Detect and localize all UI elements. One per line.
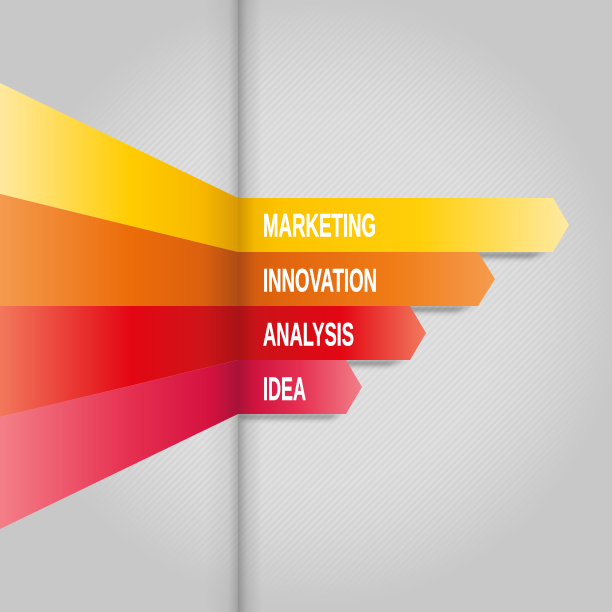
arrow: red, Analysis: [238, 306, 426, 360]
central vertical fold: [205, 0, 262, 612]
label: Analysis: ANALYSIS: [263, 316, 354, 352]
label: Marketing: MARKETING: [263, 208, 376, 244]
background: grey paper with diagonal hatching: [98, 24, 591, 576]
ribbon: red left: [0, 306, 238, 417]
arrow: pink, Idea: [238, 360, 362, 414]
arrow: yellow, Marketing: [238, 198, 569, 252]
arrow: orange, Innovation: [238, 252, 495, 306]
ribbon: yellow left: [0, 83, 238, 252]
label: Innovation: INNOVATION: [263, 262, 377, 298]
left ribbons converging on the fold: [0, 83, 238, 529]
ribbon: pink left: [0, 360, 238, 529]
label: Idea: IDEA: [263, 371, 306, 407]
ribbon: orange left: [0, 194, 238, 306]
arrow shadows: [240, 252, 548, 419]
